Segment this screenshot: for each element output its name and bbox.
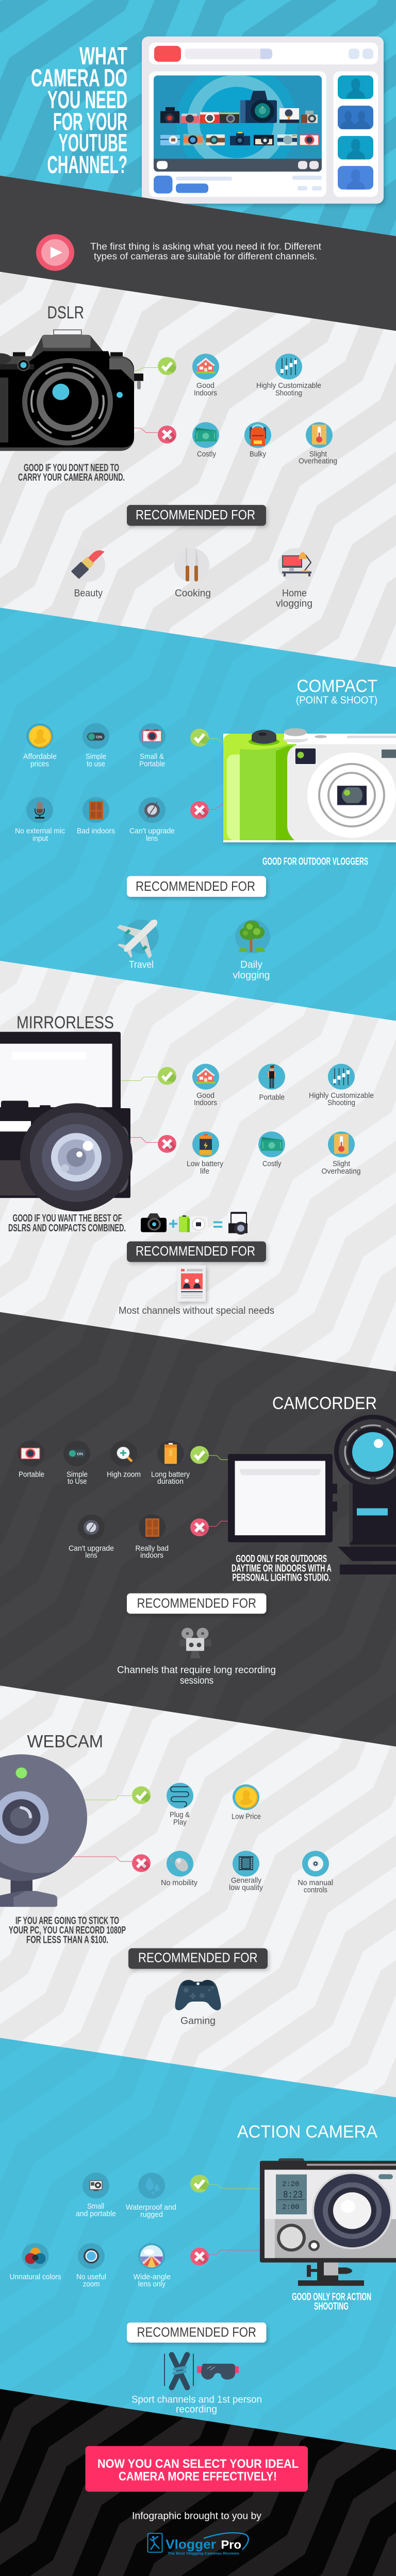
pro: waterproof and rugged: Waterproof and [126, 2204, 176, 2212]
browser main panel [149, 64, 326, 197]
button: recommended for: RECOMMENDED FOR [136, 507, 255, 522]
pro: portable [258, 1064, 285, 1102]
con: costly [192, 422, 219, 459]
con: low battery life [187, 1131, 224, 1176]
illustration: compact camera [223, 728, 396, 842]
button: recommended for: RECOMMENDED FOR [138, 1950, 258, 1965]
intro text: The first thing is asking what you need it for. Different [90, 241, 322, 251]
title [31, 43, 127, 179]
con: no manual controls: No manual [298, 1879, 333, 1887]
browser window illustration [142, 37, 384, 204]
connector: camcorder cons [209, 1521, 228, 1527]
connector: webcam pros [85, 1795, 132, 1800]
con: costly: Costly [197, 450, 217, 459]
con: low battery life: Low battery [187, 1160, 224, 1168]
channel info row [154, 176, 322, 194]
pro: affordable prices: prices [30, 760, 49, 769]
panel: intro dark band [0, 176, 396, 331]
con: slight overheating: Overheating [299, 457, 337, 465]
button: recommended for [127, 1594, 266, 1614]
connector: compact cons [209, 804, 223, 809]
connector: action cons [209, 2250, 260, 2255]
pro: plug and play: Play [173, 1819, 187, 1826]
use: home vlogging [276, 548, 313, 609]
use: home vlogging: Home [282, 588, 307, 599]
pro: highly customizable shooting: Shooting [327, 1099, 355, 1107]
use: most channels: Most channels without special needs [119, 1305, 274, 1316]
panel: footer [0, 2389, 396, 2576]
action summary [292, 2291, 371, 2312]
sidebar thumbnails [333, 72, 378, 197]
use: home vlogging: vlogging [276, 598, 312, 609]
cross badge [190, 2248, 209, 2265]
con: generally low quality: Generally [231, 1877, 262, 1885]
con: slight overheating [299, 422, 337, 465]
DSLR summary [18, 462, 125, 483]
credit text: Infographic brought to you by [132, 2511, 261, 2521]
con: no mobility: No mobility [161, 1879, 198, 1887]
con: really bad indoors [135, 1515, 169, 1560]
con: cannot upgrade lens [69, 1515, 114, 1560]
pro: small and portable: Small & [140, 753, 164, 761]
check badge [190, 1446, 209, 1464]
pro: long battery duration [151, 1440, 190, 1486]
button: recommended for [127, 1241, 266, 1262]
con: bad indoors: Bad indoors [77, 827, 115, 835]
equals sign [213, 1222, 222, 1227]
pro: small and portable: Portable [139, 760, 165, 769]
con: cannot upgrade lens: Can't upgrade [69, 1545, 114, 1553]
pro: good indoors: Indoors [194, 389, 217, 397]
con: no manual controls: controls [304, 1886, 327, 1894]
webcam summary: YOUR PC, YOU CAN RECORD 1080P [9, 1924, 126, 1936]
use: sport channels: recording [176, 2404, 217, 2415]
con: no manual controls [298, 1851, 333, 1894]
check badge [132, 1786, 151, 1804]
logo: Vlogger Pro: Pro [221, 2538, 241, 2551]
mirrorless summary: GOOD IF YOU WANT THE BEST OF [13, 1212, 122, 1224]
use: cooking: Cooking [175, 588, 211, 599]
cross badge [190, 1518, 209, 1536]
con: slight overheating: Slight [333, 1160, 350, 1168]
con: cannot upgrade lens: Can't upgrade [129, 827, 175, 835]
illustration: mirrorless camera [0, 1032, 133, 1211]
cross badge [158, 1135, 176, 1153]
pro: good indoors: Good [196, 382, 214, 390]
pro: simple to use [82, 723, 109, 769]
camera equation [141, 1212, 248, 1234]
pro: small and portable: Small [87, 2202, 104, 2211]
con: costly: Costly [262, 1160, 282, 1168]
pro: affordable prices [23, 723, 57, 769]
pro: waterproof and rugged: rugged [140, 2211, 163, 2219]
heading: mirrorless: MIRRORLESS [16, 1013, 114, 1032]
panel: camcorder [0, 1312, 396, 1747]
connector: DSLR pros [134, 367, 158, 371]
title: FOR YOUR [53, 108, 127, 135]
browser top bar [149, 43, 378, 64]
use: sport channels [131, 2354, 262, 2415]
connector: action pros [209, 2184, 260, 2189]
con: no external mic input [15, 797, 65, 843]
con: no useful zoom [76, 2243, 106, 2289]
icon: play button [36, 234, 74, 271]
illustration: action camera: 8:23 [283, 2190, 303, 2200]
pro: small and portable: and portable [76, 2210, 116, 2218]
use: long recording sessions: sessions [180, 1675, 213, 1686]
pro: good indoors [192, 1064, 219, 1107]
pro: highly customizable shooting: Highly Customizable [256, 382, 321, 390]
mirrorless summary [8, 1212, 126, 1234]
use: beauty: Beauty [74, 588, 103, 599]
pro: portable: Portable [19, 1471, 44, 1479]
pro: high zoom [107, 1440, 141, 1479]
con: no mobility [161, 1851, 198, 1887]
panel: webcam [0, 1686, 396, 2097]
con: really bad indoors: Really bad [135, 1545, 169, 1553]
button: recommended for [127, 2323, 266, 2343]
connector: DSLR cons [134, 428, 158, 433]
illustration: action camera: 2:00 [282, 2204, 300, 2211]
use: gaming: Gaming [180, 2015, 216, 2026]
row of small cameras [160, 91, 318, 123]
con: slight overheating [322, 1131, 361, 1176]
button: recommended for [127, 876, 266, 897]
connector: compact pros [209, 739, 223, 743]
pro: waterproof and rugged [126, 2173, 176, 2219]
pro: portable: Portable [259, 1094, 285, 1102]
use: beauty [70, 546, 106, 599]
illustration: DSLR camera [0, 330, 143, 451]
connector: camcorder pros [209, 1455, 228, 1460]
heading: compact [296, 676, 377, 706]
pro: simple to use: to use [87, 760, 105, 769]
panel: mirrorless [0, 961, 396, 1371]
pro: simple to use: to Use [68, 1478, 87, 1486]
panel: action camera [0, 2038, 396, 2450]
cross badge [158, 426, 176, 444]
con: bulky: Bulky [250, 450, 267, 459]
con: cannot upgrade lens: lens [146, 835, 158, 843]
con: cannot upgrade lens [129, 797, 175, 843]
pro: good indoors [192, 354, 219, 397]
check badge [158, 357, 176, 375]
action summary: SHOOTING [314, 2300, 349, 2312]
pro: highly customizable shooting [309, 1064, 374, 1107]
pro: low price: Low Price [232, 1813, 261, 1821]
camcorder summary: DAYTIME OR INDOORS WITH A [232, 1563, 332, 1574]
con: no useful zoom: No useful [76, 2273, 106, 2281]
logo: Vlogger Pro: The Best Vlogging Cameras Reviews [168, 2551, 239, 2556]
logo: Vlogger Pro [147, 2533, 249, 2556]
mini mirrorless [228, 1212, 248, 1234]
mini DSLR [141, 1213, 167, 1232]
illustration: action camera: 2:20 [282, 2181, 300, 2189]
pro: good indoors: Indoors [194, 1099, 217, 1107]
con: wide-angle lens only [133, 2243, 171, 2289]
con: really bad indoors: indoors [140, 1552, 163, 1560]
con: no external mic input: No external mic [15, 827, 65, 835]
DSLR summary: GOOD IF YOU DON'T NEED TO [24, 462, 119, 474]
pro: small and portable [139, 723, 166, 769]
use: long recording sessions [117, 1628, 276, 1686]
use: gaming [175, 1980, 221, 2026]
con: wide-angle lens only: Wide-angle [133, 2273, 171, 2281]
pro: long battery duration: duration [157, 1478, 184, 1486]
con: no external mic input: input [32, 835, 48, 843]
pro: good indoors: Good [196, 1092, 214, 1100]
illustration: camcorder [228, 1415, 396, 1574]
use: daily vlogging: Daily [240, 959, 262, 970]
mini compact [179, 1215, 208, 1232]
use: daily vlogging: vlogging [233, 970, 270, 981]
mirrorless summary: DSLRS AND COMPACTS COMBINED. [8, 1222, 126, 1234]
illustration: webcam [0, 1754, 87, 1907]
use: travel [108, 905, 173, 970]
use: daily vlogging [233, 920, 270, 981]
con: bulky [244, 422, 271, 459]
use: cooking [174, 548, 211, 599]
connector: mirrorless cons [130, 1138, 158, 1142]
button: recommended for: RECOMMENDED FOR [136, 1243, 255, 1259]
button: recommended for: RECOMMENDED FOR [137, 2325, 256, 2340]
connector: mirrorless pros [121, 1077, 158, 1081]
con: unnatural colors [9, 2243, 61, 2281]
heading: DSLR: DSLR [47, 303, 84, 323]
pro: simple to use [63, 1440, 90, 1486]
pro: simple to use: Simple [67, 1471, 88, 1479]
check badge [158, 1067, 176, 1085]
title: WHAT [79, 43, 127, 70]
intro text: types of cameras are suitable for different channels. [94, 251, 317, 261]
check badge [190, 2175, 209, 2193]
con: generally low quality [229, 1851, 263, 1892]
cross badge [132, 1854, 151, 1872]
con: bad indoors [77, 797, 115, 835]
camcorder summary: GOOD ONLY FOR OUTDOORS [236, 1553, 327, 1565]
callout: conclusion [86, 2446, 308, 2492]
use: long recording sessions: Channels that require long recording [117, 1665, 276, 1676]
webcam summary: FOR LESS THAN A $100. [26, 1934, 108, 1945]
pro: highly customizable shooting: Highly Customizable [309, 1092, 374, 1100]
camcorder summary [232, 1553, 332, 1583]
con: unnatural colors: Unnatural colors [9, 2273, 61, 2281]
con: no useful zoom: zoom [82, 2280, 100, 2289]
connector: webcam cons [73, 1857, 132, 1861]
panel: header background [0, 0, 396, 236]
use: most channels [119, 1265, 274, 1316]
plus sign [169, 1220, 177, 1228]
heading: webcam: WEBCAM [27, 1732, 103, 1751]
title: CAMERA DO [31, 64, 127, 92]
player controls [154, 159, 322, 172]
con: slight overheating: Overheating [322, 1167, 360, 1176]
intro text [90, 241, 322, 261]
con: cannot upgrade lens: lens [86, 1552, 97, 1560]
use: sport channels: Sport channels and 1st person [131, 2394, 262, 2405]
panel: DSLR [0, 272, 396, 667]
pro: highly customizable shooting [256, 354, 321, 397]
heading: compact: COMPACT [297, 676, 377, 696]
pro: small and portable [76, 2173, 116, 2218]
title: CHANNEL? [47, 151, 127, 179]
con: wide-angle lens only: lens only [138, 2280, 166, 2289]
con: costly [258, 1131, 285, 1168]
cross badge [190, 801, 209, 819]
button: recommended for: RECOMMENDED FOR [137, 1596, 256, 1611]
title: YOU NEED [47, 87, 127, 114]
illustration: action camera [260, 2158, 396, 2286]
second row of small cameras [160, 132, 319, 145]
pro: high zoom: High zoom [107, 1471, 141, 1479]
logo: Vlogger Pro: Vlogger [166, 2537, 216, 2552]
button: recommended for: RECOMMENDED FOR [136, 878, 255, 894]
button: recommended for [127, 505, 266, 526]
panel: compact [0, 607, 396, 1021]
pro: plug and play [167, 1783, 193, 1826]
con: slight overheating: Slight [309, 450, 327, 459]
DSLR summary: CARRY YOUR CAMERA AROUND. [18, 471, 125, 483]
pro: highly customizable shooting: Shooting [275, 389, 302, 397]
camcorder summary: PERSONAL LIGHTING STUDIO. [232, 1572, 331, 1583]
con: generally low quality: low quality [229, 1884, 263, 1892]
heading: camcorder: CAMCORDER [272, 1394, 377, 1413]
pro: plug and play: Plug & [170, 1811, 190, 1819]
use: travel: Travel [129, 959, 154, 970]
con: low battery life: life [200, 1167, 209, 1176]
pro: portable [18, 1440, 44, 1479]
heading: compact: (POINT & SHOOT) [296, 694, 377, 706]
pro: low price [232, 1784, 261, 1821]
pro: simple to use: Simple [86, 753, 106, 761]
webcam summary: IF YOU ARE GOING TO STICK TO [15, 1915, 119, 1926]
webcam summary [9, 1915, 126, 1945]
title: YOUTUBE [59, 129, 127, 157]
callout: conclusion: NOW YOU CAN SELECT YOUR IDEAL [97, 2458, 299, 2471]
heading: action camera: ACTION CAMERA [237, 2122, 377, 2142]
video player with cameras [154, 75, 322, 172]
callout: conclusion: CAMERA MORE EFFECTIVELY! [119, 2470, 277, 2484]
pro: long battery duration: Long battery [151, 1471, 190, 1479]
pro: affordable prices: Affordable [23, 753, 57, 761]
check badge [190, 728, 209, 747]
button: recommended for [128, 1948, 268, 1969]
